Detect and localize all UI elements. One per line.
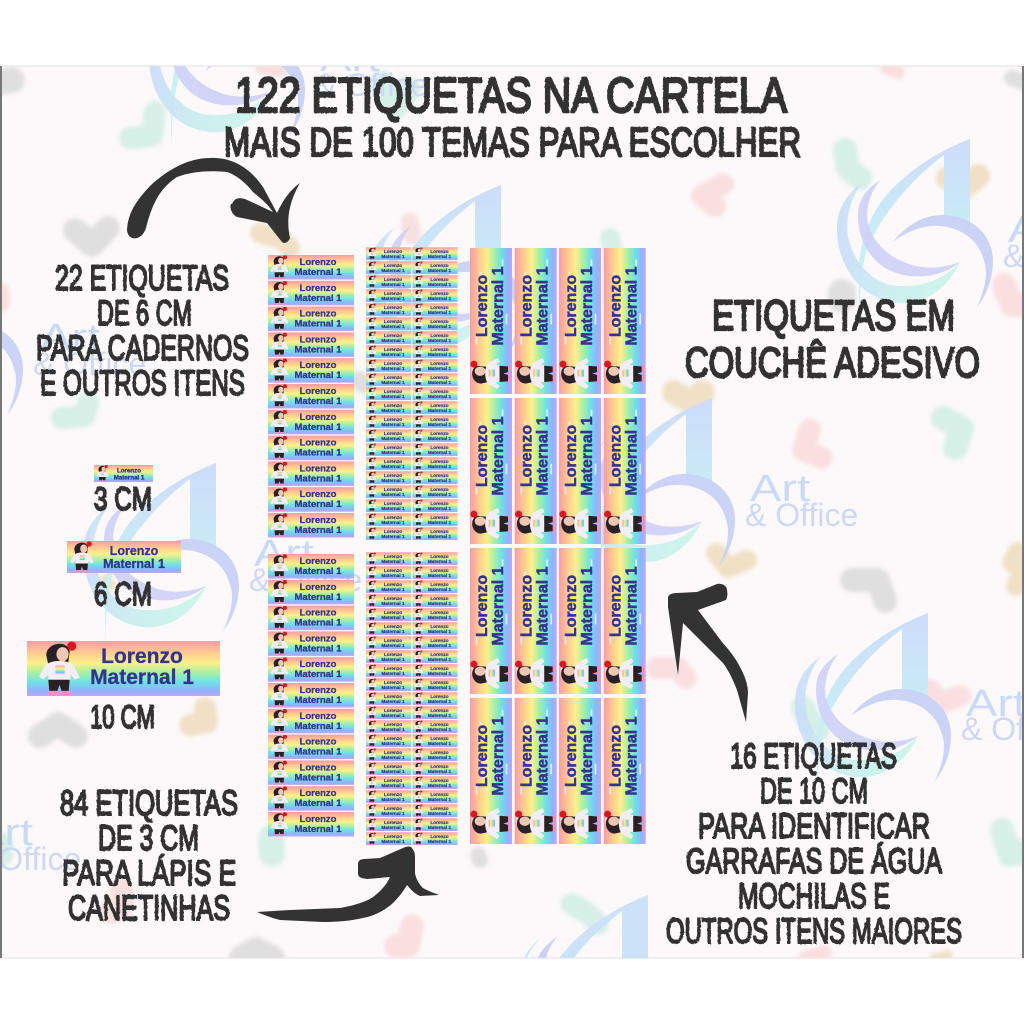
background pattern of balloon hearts and logo watermarks: & Office (315, 67, 428, 103)
label sheet: 84 labels of 3 cm: Lorenzo (384, 638, 402, 643)
label sheet: 22 labels of 6 cm: Lorenzo (300, 762, 337, 773)
label sheet: 84 labels of 3 cm: Maternal 1 (381, 811, 405, 816)
label sheet: 84 labels of 3 cm: Maternal 1 (381, 520, 405, 525)
label sheet: 84 labels of 3 cm: Lorenzo (384, 666, 402, 671)
text: 22 labels of 6 cm: 22 ETIQUETAS (55, 259, 229, 298)
label sheet: 16 labels of 10 cm: Maternal 1 (535, 566, 552, 646)
label sheet: 84 labels of 3 cm: Lorenzo (430, 834, 449, 839)
text: 22 labels of 6 cm: DE 6 CM (97, 294, 192, 333)
label sheet: 84 labels of 3 cm: Maternal 1 (428, 685, 451, 690)
label sheet: 84 labels of 3 cm: Maternal 1 (428, 422, 451, 427)
label sheet: 84 labels of 3 cm: Maternal 1 (428, 797, 451, 802)
label sheet: 16 labels of 10 cm: Lorenzo (608, 275, 625, 337)
label sheet: 84 labels of 3 cm: Maternal 1 (381, 352, 405, 357)
label sheet: 84 labels of 3 cm: Lorenzo (384, 389, 402, 394)
label sheet: 84 labels of 3 cm: Maternal 1 (428, 324, 451, 329)
arrow: 10 cm text to 10 cm labels (668, 584, 748, 722)
label sheet: 84 labels of 3 cm: Lorenzo (430, 389, 449, 394)
label sheet: 84 labels of 3 cm: Maternal 1 (428, 769, 451, 774)
title: MAIS DE 100 TEMAS PARA ESCOLHER (224, 119, 801, 165)
label sheet: 84 labels of 3 cm: Lorenzo (430, 736, 449, 741)
label sheet: 16 labels of 10 cm: Lorenzo (519, 575, 536, 637)
label sheet: 22 labels of 6 cm: Maternal 1 (294, 267, 342, 278)
label sheet: 22 labels of 6 cm: Maternal 1 (294, 499, 342, 510)
label sheet: 84 labels of 3 cm: Lorenzo (430, 375, 449, 380)
label sheet: 84 labels of 3 cm: Lorenzo (430, 333, 449, 338)
label sheet: 84 labels of 3 cm: Maternal 1 (428, 559, 451, 564)
label sheet: 84 labels of 3 cm: Maternal 1 (381, 282, 405, 287)
label sheet: 84 labels of 3 cm: Maternal 1 (381, 559, 405, 564)
label sheet: 16 labels of 10 cm: Maternal 1 (535, 716, 552, 796)
label sheet: 84 labels of 3 cm: Maternal 1 (428, 282, 451, 287)
label sheet: 84 labels of 3 cm: Maternal 1 (381, 436, 405, 441)
label sheet: 84 labels of 3 cm: Maternal 1 (381, 587, 405, 592)
label sheet: 16 labels of 10 cm: Maternal 1 (490, 716, 507, 796)
label sheet: 22 labels of 6 cm: Lorenzo (300, 438, 337, 449)
label sheet: 84 labels of 3 cm: Lorenzo (384, 834, 402, 839)
label sheet: 16 labels of 10 cm: Lorenzo (608, 425, 625, 487)
label sheet: 84 labels of 3 cm: Lorenzo (430, 263, 449, 268)
label sheet: 16 labels of 10 cm: Maternal 1 (624, 266, 641, 346)
label sheet: 84 labels of 3 cm: Maternal 1 (428, 492, 451, 497)
label sheet: 84 labels of 3 cm: Maternal 1 (381, 310, 405, 315)
label sheet: 84 labels of 3 cm: Maternal 1 (381, 573, 405, 578)
label sheet: 84 labels of 3 cm: Lorenzo (384, 347, 402, 352)
label sheet: 84 labels of 3 cm: Maternal 1 (428, 601, 451, 606)
label sheet: 84 labels of 3 cm: Lorenzo (430, 680, 449, 685)
label sheet: 84 labels of 3 cm: Maternal 1 (428, 587, 451, 592)
label sheet: 84 labels of 3 cm: Maternal 1 (428, 268, 451, 273)
label sheet: 22 labels of 6 cm: Lorenzo (300, 386, 337, 397)
arrow: title to 6 cm labels (127, 158, 300, 243)
text: 16 labels of 10 cm: MOCHILAS E (738, 877, 890, 916)
label sheet: 84 labels of 3 cm: Lorenzo (384, 764, 402, 769)
background pattern of balloon hearts and logo watermarks: Art (320, 38, 381, 80)
label sheet: 22 labels of 6 cm: Maternal 1 (294, 319, 342, 330)
label sheet: 84 labels of 3 cm: Maternal 1 (381, 699, 405, 704)
label sheet: 84 labels of 3 cm: Maternal 1 (428, 699, 451, 704)
label sheet: 22 labels of 6 cm: Maternal 1 (294, 772, 342, 783)
label sheet: 84 labels of 3 cm: Maternal 1 (381, 769, 405, 774)
label sheet: 16 labels of 10 cm: Lorenzo (608, 725, 625, 787)
label sheet: 22 labels of 6 cm: Lorenzo (300, 257, 337, 268)
text: 16 labels of 10 cm: DE 10 CM (760, 772, 868, 811)
label sheet: 16 labels of 10 cm: Lorenzo (563, 275, 580, 337)
label sheet: 22 labels of 6 cm: Maternal 1 (294, 525, 342, 536)
label sheet: 84 labels of 3 cm: Maternal 1 (428, 839, 451, 844)
label sheet: 22 labels of 6 cm: Maternal 1 (294, 798, 342, 809)
label sheet: 84 labels of 3 cm: Maternal 1 (381, 450, 405, 455)
label sheet: 16 labels of 10 cm: Lorenzo (474, 575, 491, 637)
label sheet: 22 labels of 6 cm: Maternal 1 (294, 618, 342, 629)
label sheet: 16 labels of 10 cm: Lorenzo (519, 425, 536, 487)
label sheet: 84 labels of 3 cm: Lorenzo (384, 652, 402, 657)
label sheet: 84 labels of 3 cm: Lorenzo (384, 263, 402, 268)
label sheet: 84 labels of 3 cm: Maternal 1 (381, 506, 405, 511)
label sheet: 84 labels of 3 cm: Maternal 1 (381, 825, 405, 830)
label sheet: 84 labels of 3 cm: Lorenzo (384, 445, 402, 450)
label sheet: 16 labels of 10 cm: Maternal 1 (624, 716, 641, 796)
label sheet: 84 labels of 3 cm: Maternal 1 (428, 741, 451, 746)
label sheet: 84 labels of 3 cm: Lorenzo (430, 694, 449, 699)
label sheet: 22 labels of 6 cm: Maternal 1 (294, 824, 342, 835)
background pattern of balloon hearts and logo watermarks: Art (966, 683, 1024, 725)
label sheet: 84 labels of 3 cm: Maternal 1 (428, 450, 451, 455)
label sheet: 22 labels of 6 cm: Maternal 1 (294, 669, 342, 680)
size caption 3 cm: 3 CM (94, 481, 152, 517)
label sheet: 16 labels of 10 cm: Maternal 1 (490, 266, 507, 346)
label sheet: 84 labels of 3 cm: Lorenzo (430, 652, 449, 657)
label sheet: 16 labels of 10 cm: Lorenzo (519, 725, 536, 787)
sample label 6 cm (67, 541, 181, 573)
label sheet: 84 labels of 3 cm: Lorenzo (430, 403, 449, 408)
label sheet: 84 labels of 3 cm: Maternal 1 (381, 657, 405, 662)
label sheet: 84 labels of 3 cm (366, 247, 458, 845)
label sheet: 22 labels of 6 cm: Lorenzo (300, 711, 337, 722)
label sheet: 22 labels of 6 cm: Lorenzo (300, 788, 337, 799)
label sheet: 16 labels of 10 cm: Maternal 1 (579, 416, 596, 496)
label sheet: 22 labels of 6 cm: Lorenzo (300, 309, 337, 320)
label sheet: 22 labels of 6 cm: Maternal 1 (294, 747, 342, 758)
label sheet: 84 labels of 3 cm: Maternal 1 (428, 755, 451, 760)
label sheet: 84 labels of 3 cm: Maternal 1 (428, 436, 451, 441)
label sheet: 22 labels of 6 cm: Lorenzo (300, 360, 337, 371)
label sheet: 84 labels of 3 cm: Lorenzo (430, 792, 449, 797)
background pattern of balloon hearts and logo watermarks: & Office (745, 497, 858, 533)
label sheet: 84 labels of 3 cm: Lorenzo (384, 596, 402, 601)
label sheet: 22 labels of 6 cm: Maternal 1 (294, 396, 342, 407)
label sheet: 16 labels of 10 cm: Lorenzo (474, 425, 491, 487)
label sheet: 84 labels of 3 cm: Maternal 1 (381, 685, 405, 690)
label sheet: 84 labels of 3 cm: Maternal 1 (428, 825, 451, 830)
label sheet: 84 labels of 3 cm: Maternal 1 (428, 478, 451, 483)
label sheet: 84 labels of 3 cm: Lorenzo (384, 417, 402, 422)
label sheet: 16 labels of 10 cm: Maternal 1 (535, 416, 552, 496)
label sheet: 84 labels of 3 cm: Maternal 1 (428, 520, 451, 525)
label sheet: 84 labels of 3 cm: Maternal 1 (381, 254, 405, 259)
label sheet: 84 labels of 3 cm: Lorenzo (384, 501, 402, 506)
label sheet: 84 labels of 3 cm: Maternal 1 (428, 310, 451, 315)
label sheet: 84 labels of 3 cm: Maternal 1 (381, 601, 405, 606)
background pattern of balloon hearts and logo watermarks: & Office (33, 346, 146, 382)
label sheet: 22 labels of 6 cm: Maternal 1 (294, 344, 342, 355)
label sheet: 84 labels of 3 cm: Lorenzo (384, 249, 402, 254)
label sheet: 22 labels of 6 cm: Maternal 1 (294, 422, 342, 433)
label sheet: 84 labels of 3 cm: Lorenzo (430, 554, 449, 559)
label sheet: 84 labels of 3 cm: Lorenzo (430, 431, 449, 436)
label sheet: 84 labels of 3 cm: Lorenzo (384, 736, 402, 741)
label sheet: 84 labels of 3 cm: Lorenzo (430, 515, 449, 520)
label sheet: 22 labels of 6 cm: Lorenzo (300, 737, 337, 748)
label sheet: 84 labels of 3 cm: Maternal 1 (381, 741, 405, 746)
label sheet: 22 labels of 6 cm: Lorenzo (300, 582, 337, 593)
text: 16 labels of 10 cm (666, 737, 962, 951)
label sheet: 84 labels of 3 cm: Lorenzo (430, 277, 449, 282)
label sheet: 84 labels of 3 cm: Maternal 1 (428, 380, 451, 385)
label sheet: 84 labels of 3 cm: Lorenzo (384, 277, 402, 282)
label sheet: 22 labels of 6 cm: Lorenzo (300, 556, 337, 567)
label sheet: 84 labels of 3 cm: Maternal 1 (428, 643, 451, 648)
label sheet: 84 labels of 3 cm: Lorenzo (384, 431, 402, 436)
label sheet: 84 labels of 3 cm: Maternal 1 (381, 268, 405, 273)
label sheet: 84 labels of 3 cm: Maternal 1 (428, 629, 451, 634)
label sheet: 84 labels of 3 cm: Lorenzo (430, 722, 449, 727)
label sheet: 22 labels of 6 cm: Lorenzo (300, 814, 337, 825)
title: 122 ETIQUETAS NA CARTELA (235, 69, 787, 123)
label sheet: 84 labels of 3 cm: Maternal 1 (381, 671, 405, 676)
label sheet: 84 labels of 3 cm: Lorenzo (430, 473, 449, 478)
label sheet: 16 labels of 10 cm: Maternal 1 (535, 266, 552, 346)
label sheet: 84 labels of 3 cm: Lorenzo (430, 291, 449, 296)
label sheet: 22 labels of 6 cm: Lorenzo (300, 685, 337, 696)
label sheet: 84 labels of 3 cm: Maternal 1 (428, 338, 451, 343)
label sheet: 84 labels of 3 cm: Lorenzo (430, 417, 449, 422)
label sheet: 84 labels of 3 cm: Maternal 1 (381, 380, 405, 385)
label sheet: 84 labels of 3 cm: Lorenzo (430, 638, 449, 643)
label sheet: 16 labels of 10 cm: Lorenzo (474, 725, 491, 787)
label sheet: 84 labels of 3 cm: Lorenzo (384, 722, 402, 727)
label sheet: 84 labels of 3 cm: Maternal 1 (381, 478, 405, 483)
text: 16 labels of 10 cm: 16 ETIQUETAS (730, 737, 897, 776)
label sheet: 84 labels of 3 cm: Lorenzo (430, 582, 449, 587)
label sheet: 84 labels of 3 cm: Lorenzo (430, 778, 449, 783)
label sheet: 16 labels of 10 cm: Maternal 1 (579, 716, 596, 796)
label sheet: 84 labels of 3 cm: Lorenzo (384, 708, 402, 713)
label sheet: 84 labels of 3 cm: Lorenzo (430, 361, 449, 366)
label sheet: 16 labels of 10 cm (470, 248, 646, 844)
label sheet: 84 labels of 3 cm: Maternal 1 (428, 534, 451, 539)
label sheet: 84 labels of 3 cm: Lorenzo (430, 750, 449, 755)
label sheet: 84 labels of 3 cm: Maternal 1 (381, 713, 405, 718)
label sheet: 84 labels of 3 cm: Maternal 1 (428, 573, 451, 578)
size caption 10 cm: 10 CM (90, 699, 155, 735)
label sheet: 84 labels of 3 cm: Maternal 1 (381, 783, 405, 788)
label sheet: 84 labels of 3 cm: Lorenzo (430, 806, 449, 811)
label sheet: 84 labels of 3 cm: Lorenzo (430, 610, 449, 615)
size caption 6 cm: 6 CM (94, 576, 152, 612)
sample label 10 cm: Lorenzo (101, 645, 183, 668)
label sheet: 84 labels of 3 cm: Lorenzo (384, 820, 402, 825)
label sheet: 84 labels of 3 cm: Maternal 1 (428, 783, 451, 788)
label sheet: 84 labels of 3 cm: Lorenzo (384, 403, 402, 408)
label sheet: 84 labels of 3 cm: Lorenzo (430, 459, 449, 464)
label sheet: 84 labels of 3 cm: Maternal 1 (381, 797, 405, 802)
label sheet: 22 labels of 6 cm: Maternal 1 (294, 695, 342, 706)
text: 84 labels of 3 cm: DE 3 CM (98, 819, 199, 858)
label sheet: 16 labels of 10 cm: Lorenzo (563, 575, 580, 637)
sample label 3 cm: Lorenzo (117, 468, 141, 474)
label sheet: 84 labels of 3 cm: Maternal 1 (428, 254, 451, 259)
label sheet: 84 labels of 3 cm: Maternal 1 (428, 296, 451, 301)
label sheet: 84 labels of 3 cm: Lorenzo (384, 291, 402, 296)
label sheet: 84 labels of 3 cm: Maternal 1 (381, 296, 405, 301)
sample label 10 cm (27, 641, 220, 696)
sample label 10 cm: Maternal 1 (90, 666, 194, 689)
background pattern of balloon hearts and logo watermarks: Art (750, 468, 811, 510)
label sheet: 84 labels of 3 cm: Lorenzo (384, 792, 402, 797)
label sheet: 84 labels of 3 cm: Maternal 1 (428, 615, 451, 620)
label sheet: 22 labels of 6 cm: Lorenzo (300, 659, 337, 670)
label sheet: 84 labels of 3 cm: Lorenzo (384, 473, 402, 478)
label sheet: 84 labels of 3 cm: Maternal 1 (381, 422, 405, 427)
label sheet: 84 labels of 3 cm: Maternal 1 (428, 671, 451, 676)
label sheet: 22 labels of 6 cm: Maternal 1 (294, 721, 342, 732)
arrow: 3 cm text to 3 cm labels (257, 846, 439, 922)
label sheet: 84 labels of 3 cm: Maternal 1 (381, 615, 405, 620)
label sheet: 84 labels of 3 cm: Lorenzo (384, 529, 402, 534)
label sheet: 84 labels of 3 cm: Lorenzo (430, 347, 449, 352)
label sheet: 16 labels of 10 cm: Lorenzo (563, 725, 580, 787)
text: 22 labels of 6 cm: PARA CADERNOS (36, 329, 249, 368)
label sheet: 84 labels of 3 cm: Lorenzo (384, 750, 402, 755)
label sheet: 84 labels of 3 cm: Maternal 1 (381, 366, 405, 371)
label sheet: 16 labels of 10 cm: Maternal 1 (490, 566, 507, 646)
label sheet: 84 labels of 3 cm: Lorenzo (384, 778, 402, 783)
text: 84 labels of 3 cm (60, 784, 238, 928)
label sheet: 84 labels of 3 cm: Maternal 1 (381, 324, 405, 329)
label sheet: 22 labels of 6 cm: Maternal 1 (294, 643, 342, 654)
sample label 3 cm (94, 465, 153, 482)
label sheet: 84 labels of 3 cm: Lorenzo (430, 708, 449, 713)
label sheet: 22 labels of 6 cm: Maternal 1 (294, 592, 342, 603)
text: 84 labels of 3 cm: CANETINHAS (68, 889, 230, 928)
label sheet: 84 labels of 3 cm: Maternal 1 (381, 643, 405, 648)
background pattern of balloon hearts and logo watermarks: Art (254, 533, 315, 575)
label sheet: 22 labels of 6 cm: Lorenzo (300, 412, 337, 423)
label sheet: 16 labels of 10 cm: Lorenzo (563, 425, 580, 487)
heading: material (685, 292, 980, 387)
label sheet: 84 labels of 3 cm: Lorenzo (384, 582, 402, 587)
label sheet: 84 labels of 3 cm: Lorenzo (384, 554, 402, 559)
label sheet: 84 labels of 3 cm: Maternal 1 (381, 629, 405, 634)
label sheet: 84 labels of 3 cm: Maternal 1 (428, 657, 451, 662)
label sheet: 16 labels of 10 cm: Maternal 1 (624, 416, 641, 496)
label sheet: 84 labels of 3 cm: Lorenzo (384, 806, 402, 811)
label sheet: 84 labels of 3 cm: Lorenzo (384, 361, 402, 366)
label sheet: 84 labels of 3 cm: Lorenzo (430, 568, 449, 573)
label sheet: 22 labels of 6 cm: Lorenzo (300, 283, 337, 294)
text: 84 labels of 3 cm: 84 ETIQUETAS (60, 784, 238, 823)
label sheet: 84 labels of 3 cm: Maternal 1 (381, 394, 405, 399)
label sheet: 16 labels of 10 cm: Lorenzo (519, 275, 536, 337)
label sheet: 84 labels of 3 cm: Lorenzo (384, 459, 402, 464)
label sheet: 84 labels of 3 cm: Lorenzo (384, 305, 402, 310)
label sheet: 84 labels of 3 cm: Lorenzo (430, 820, 449, 825)
label sheet: 84 labels of 3 cm: Lorenzo (430, 305, 449, 310)
label sheet: 22 labels of 6 cm: Lorenzo (300, 489, 337, 500)
label sheet: 22 labels of 6 cm: Lorenzo (300, 515, 337, 526)
label sheet: 84 labels of 3 cm: Maternal 1 (428, 713, 451, 718)
label sheet: 84 labels of 3 cm: Lorenzo (430, 529, 449, 534)
sample label 3 cm: Maternal 1 (114, 474, 145, 482)
label sheet: 84 labels of 3 cm: Maternal 1 (381, 408, 405, 413)
label sheet: 22 labels of 6 cm: Lorenzo (300, 633, 337, 644)
label sheet: 84 labels of 3 cm: Maternal 1 (428, 506, 451, 511)
heading: material: ETIQUETAS EM (712, 292, 955, 340)
label sheet: 84 labels of 3 cm: Maternal 1 (381, 839, 405, 844)
label sheet: 16 labels of 10 cm: Maternal 1 (579, 566, 596, 646)
label sheet: 84 labels of 3 cm: Lorenzo (430, 249, 449, 254)
label sheet: 84 labels of 3 cm: Maternal 1 (428, 811, 451, 816)
label sheet: 22 labels of 6 cm: Lorenzo (300, 463, 337, 474)
label sheet: 16 labels of 10 cm: Maternal 1 (624, 566, 641, 646)
label sheet: 84 labels of 3 cm: Maternal 1 (428, 352, 451, 357)
label sheet: 84 labels of 3 cm: Lorenzo (430, 487, 449, 492)
label sheet: 16 labels of 10 cm: Lorenzo (474, 275, 491, 337)
label sheet: 22 labels of 6 cm (268, 255, 354, 836)
label sheet: 84 labels of 3 cm: Maternal 1 (428, 727, 451, 732)
label sheet: 84 labels of 3 cm: Lorenzo (430, 501, 449, 506)
label sheet: 84 labels of 3 cm: Lorenzo (384, 487, 402, 492)
label sheet: 84 labels of 3 cm: Maternal 1 (381, 492, 405, 497)
text: 22 labels of 6 cm (36, 259, 249, 403)
label sheet: 16 labels of 10 cm: Maternal 1 (579, 266, 596, 346)
label sheet: 84 labels of 3 cm: Maternal 1 (381, 755, 405, 760)
sample label 6 cm: Maternal 1 (103, 557, 165, 571)
label sheet: 84 labels of 3 cm: Maternal 1 (381, 727, 405, 732)
label sheet: 16 labels of 10 cm: Maternal 1 (490, 416, 507, 496)
label sheet: 22 labels of 6 cm: Maternal 1 (294, 566, 342, 577)
text: 84 labels of 3 cm: PARA LÁPIS E (62, 854, 236, 893)
sample label 6 cm: Lorenzo (110, 544, 159, 558)
label sheet: 84 labels of 3 cm: Lorenzo (384, 515, 402, 520)
label sheet: 84 labels of 3 cm: Maternal 1 (428, 408, 451, 413)
label sheet: 84 labels of 3 cm: Lorenzo (384, 333, 402, 338)
background pattern of balloon hearts and logo watermarks: Art (40, 317, 101, 359)
label sheet: 84 labels of 3 cm: Lorenzo (430, 666, 449, 671)
label sheet: 84 labels of 3 cm: Lorenzo (384, 680, 402, 685)
label sheet: 84 labels of 3 cm: Lorenzo (384, 375, 402, 380)
label sheet: 84 labels of 3 cm: Maternal 1 (428, 366, 451, 371)
background pattern of balloon hearts and logo watermarks: & Office (249, 562, 362, 598)
text: 22 labels of 6 cm: E OUTROS ITENS (40, 364, 245, 403)
label sheet: 16 labels of 10 cm: Lorenzo (608, 575, 625, 637)
label sheet: 84 labels of 3 cm: Maternal 1 (428, 394, 451, 399)
label sheet: 84 labels of 3 cm: Lorenzo (430, 624, 449, 629)
label sheet: 84 labels of 3 cm: Lorenzo (384, 694, 402, 699)
label sheet: 84 labels of 3 cm: Lorenzo (384, 319, 402, 324)
label sheet: 84 labels of 3 cm: Maternal 1 (381, 464, 405, 469)
label sheet: 22 labels of 6 cm: Maternal 1 (294, 448, 342, 459)
label sheet: 84 labels of 3 cm: Lorenzo (384, 610, 402, 615)
label sheet: 84 labels of 3 cm: Lorenzo (384, 624, 402, 629)
label sheet: 84 labels of 3 cm: Lorenzo (430, 596, 449, 601)
label sheet: 84 labels of 3 cm: Maternal 1 (381, 534, 405, 539)
title (224, 69, 801, 165)
label sheet: 22 labels of 6 cm: Maternal 1 (294, 293, 342, 304)
label sheet: 22 labels of 6 cm: Lorenzo (300, 608, 337, 619)
label sheet: 22 labels of 6 cm: Lorenzo (300, 334, 337, 345)
label sheet: 22 labels of 6 cm: Maternal 1 (294, 473, 342, 484)
label sheet: 84 labels of 3 cm: Lorenzo (384, 568, 402, 573)
label sheet: 84 labels of 3 cm: Lorenzo (430, 764, 449, 769)
label sheet: 84 labels of 3 cm: Lorenzo (430, 319, 449, 324)
label sheet: 84 labels of 3 cm: Maternal 1 (381, 338, 405, 343)
label sheet: 84 labels of 3 cm: Maternal 1 (428, 464, 451, 469)
text: 16 labels of 10 cm: PARA IDENTIFICAR (698, 807, 930, 846)
label sheet: 22 labels of 6 cm: Maternal 1 (294, 370, 342, 381)
label sheet: 84 labels of 3 cm: Lorenzo (430, 445, 449, 450)
